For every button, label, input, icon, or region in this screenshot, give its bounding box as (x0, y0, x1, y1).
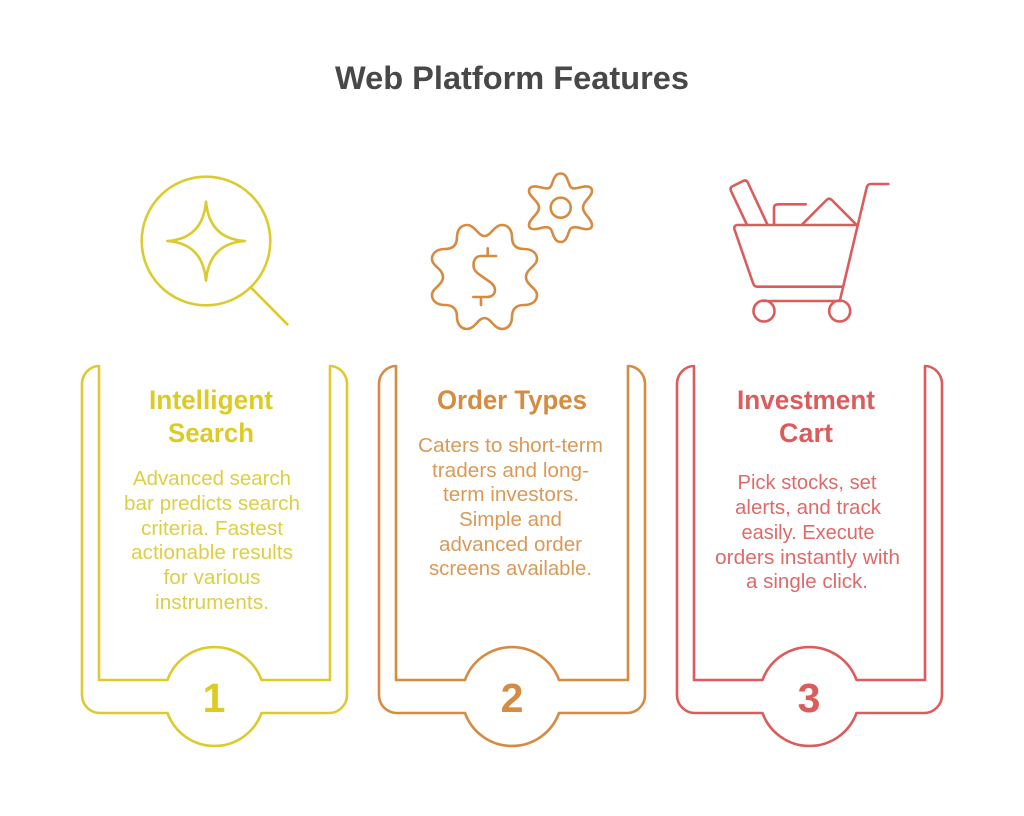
card frame 2 (379, 366, 645, 746)
body text: Investment Cart: orders instantly with (715, 547, 900, 569)
heading: Intelligent Search: Search (168, 418, 254, 448)
panel: Order Types (379, 174, 645, 746)
body text: Investment Cart: alerts, and track (735, 497, 882, 519)
body text: Order Types: traders and long- (432, 460, 589, 482)
body text: Investment Cart: a single click. (746, 571, 868, 593)
body text: Order Types (418, 435, 603, 580)
number 1: 1 (203, 675, 225, 721)
icon: magnifier with sparkle (142, 177, 287, 324)
body text: Intelligent Search: Advanced search (133, 468, 291, 490)
panel: Intelligent Search (82, 177, 347, 746)
heading: Investment Cart (737, 385, 875, 448)
icon: shopping cart (730, 180, 888, 322)
card frame 1 (82, 366, 347, 746)
body text: Order Types: advanced order (439, 534, 582, 556)
card frame 3 (677, 366, 942, 746)
body text: Intelligent Search: instruments. (155, 592, 269, 614)
body text: Investment Cart: easily. Execute (742, 522, 874, 544)
body text: Intelligent Search: actionable results (131, 542, 293, 564)
body text: Order Types: Simple and (459, 509, 562, 531)
body text: Order Types: term investors. (443, 484, 579, 506)
heading: Intelligent Search: Intelligent (149, 385, 273, 415)
icon: gears with dollar sign (432, 174, 592, 329)
body text: Order Types: Caters to short-term (418, 435, 603, 457)
title: Web Platform Features (335, 60, 689, 96)
body text: Order Types: screens available. (429, 558, 592, 580)
heading: Investment Cart: Investment (737, 385, 875, 415)
body text: Intelligent Search: bar predicts search (124, 493, 300, 515)
panel: Investment Cart (677, 180, 942, 746)
body text: Intelligent Search: criteria. Fastest (141, 518, 283, 540)
heading: Order Types: Order Types (437, 385, 587, 415)
body text: Intelligent Search: for various (164, 567, 260, 589)
heading: Intelligent Search (149, 385, 273, 448)
body text: Investment Cart (715, 472, 900, 593)
body text: Investment Cart: Pick stocks, set (738, 472, 877, 494)
body text: Intelligent Search (124, 468, 300, 614)
number 2: 2 (501, 675, 523, 721)
heading: Investment Cart: Cart (779, 418, 833, 448)
number 3: 3 (798, 675, 820, 721)
